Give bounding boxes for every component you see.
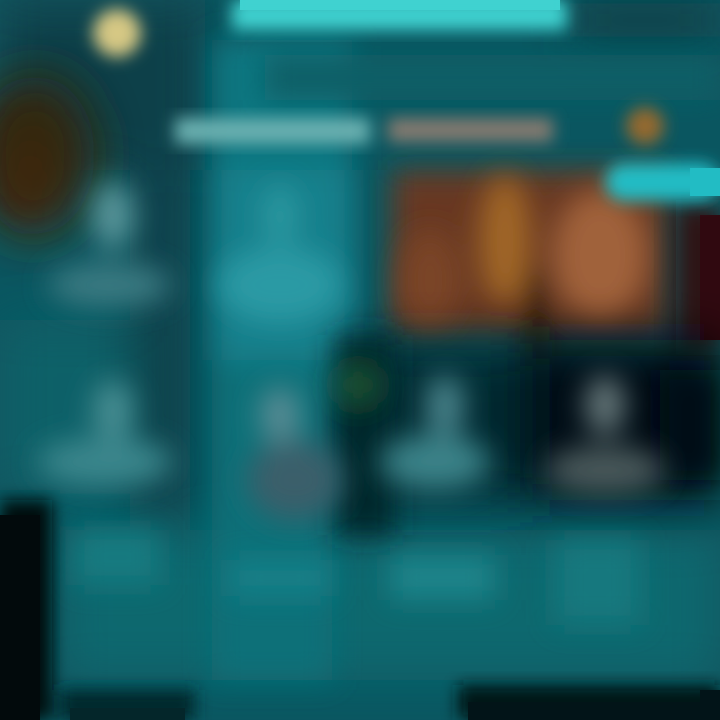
left brown blob — [0, 75, 95, 240]
caption blocks — [75, 530, 640, 625]
figure: lower person one — [37, 380, 173, 486]
figure: upper left person — [48, 181, 172, 307]
panel: central teal column — [212, 40, 354, 680]
figure: lower person two — [247, 387, 343, 520]
bottom right dark block — [458, 685, 720, 720]
dark vertical bar — [335, 335, 395, 535]
banner: top cyan bar — [232, 0, 567, 30]
header band — [265, 55, 720, 100]
dark lower panels — [370, 340, 720, 500]
panel highlights — [400, 175, 648, 370]
icon: light orb — [93, 9, 141, 57]
figure: upper middle person — [218, 185, 342, 323]
figure: lower person three — [380, 375, 490, 490]
dark red side panel — [676, 200, 720, 355]
panel: orange photo — [392, 170, 667, 335]
heading: blurred title — [175, 118, 553, 144]
bottom left dark block — [0, 500, 195, 720]
icon: orange orb — [626, 107, 664, 145]
pill: cyan button — [605, 163, 720, 201]
figure: lower person four — [545, 375, 665, 494]
